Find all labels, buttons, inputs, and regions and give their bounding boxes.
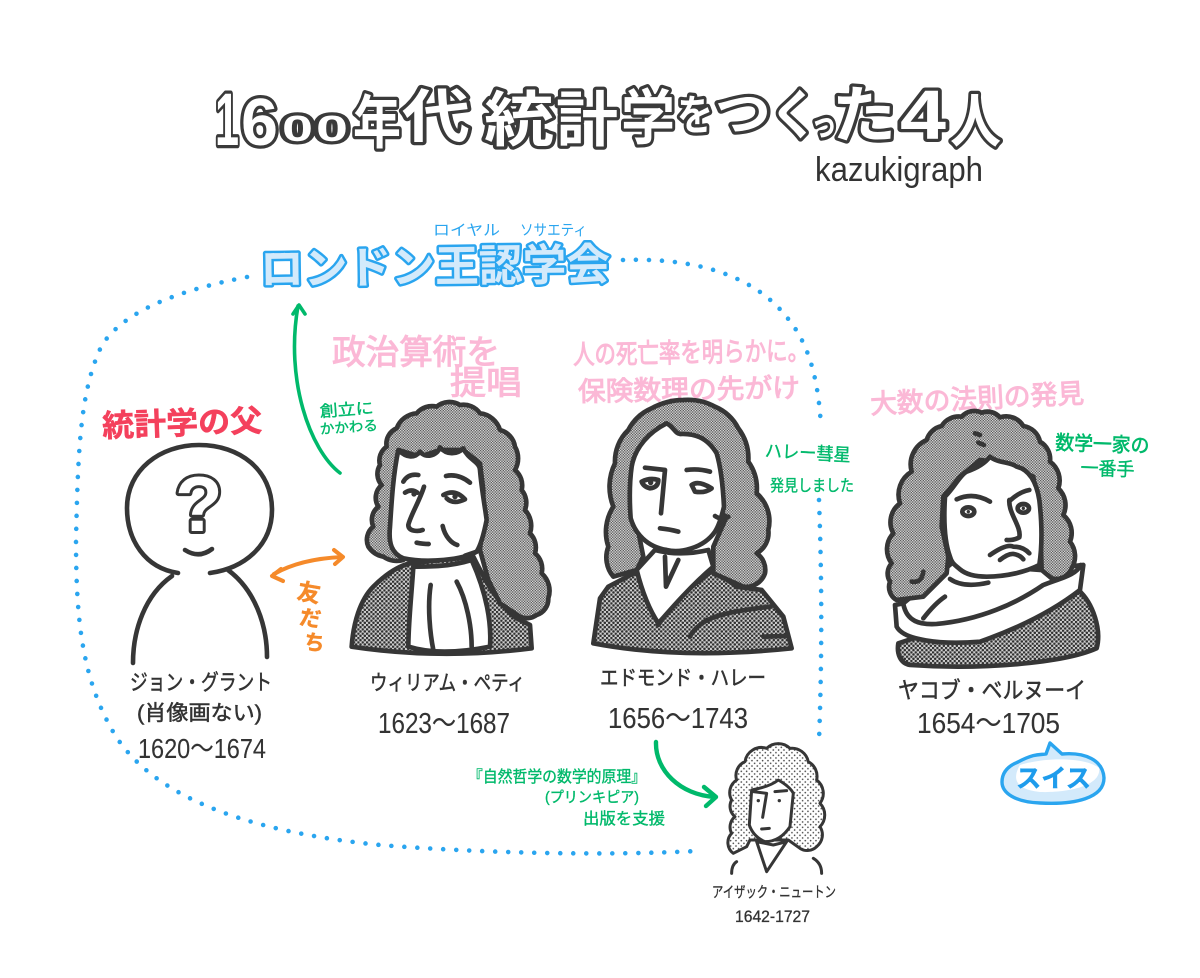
note: first of the math family xyxy=(1054,431,1150,482)
title: 代 xyxy=(402,85,470,150)
face xyxy=(749,780,793,842)
heading: law of large numbers: 大数の法則の発見 xyxy=(869,378,1085,420)
label: friends: ち xyxy=(302,630,327,657)
portrait: Isaac Newton xyxy=(728,744,825,873)
caption: William Petty: 1623〜1687 xyxy=(378,708,510,740)
arrow: friends xyxy=(272,550,343,581)
title: 4 xyxy=(900,76,946,154)
author credit: kazukigraph xyxy=(815,151,983,189)
caption: Isaac Newton: 1642-1727 xyxy=(735,907,810,926)
heading: mortality & actuarial pioneer: 人の死亡率を明らかに。 xyxy=(573,336,809,370)
scarf xyxy=(408,560,490,652)
note: Halley's comet xyxy=(764,441,854,495)
heading: mortality & actuarial pioneer: 保険数理の先がけ xyxy=(578,373,800,407)
note: Principia publication support: 『自然哲学の数学的原理』 xyxy=(468,768,646,786)
features xyxy=(403,475,418,482)
speech bubble: Switzerland: スイス xyxy=(1016,765,1091,793)
caption: William Petty xyxy=(370,672,525,740)
portrait: John Graunt silhouette xyxy=(127,445,272,663)
note: founding involvement: かかわる xyxy=(319,417,378,437)
heading: political arithmetic: 政治算術を xyxy=(332,334,500,372)
caption: John Graunt: ジョン・グラント xyxy=(130,670,272,695)
coat xyxy=(352,557,532,654)
dotted boundary: Royal Society xyxy=(76,277,697,853)
title: 学 xyxy=(621,85,675,152)
features xyxy=(753,792,767,817)
title: 0 xyxy=(282,108,313,149)
coat xyxy=(593,570,792,653)
caption: William Petty: ウィリアム・ペティ xyxy=(370,672,525,695)
coat folds xyxy=(690,607,770,637)
wig xyxy=(887,411,1075,600)
face xyxy=(944,457,1041,577)
note: founding involvement: 創立に xyxy=(319,399,374,421)
title: 1 xyxy=(215,78,239,161)
label: father of statistics: 統計学の父 xyxy=(102,403,263,444)
wig xyxy=(606,400,769,587)
title: 年 xyxy=(353,91,401,156)
coat xyxy=(898,590,1098,667)
portrait: Edmond Halley xyxy=(593,400,792,653)
caption: Edmond Halley: 1656〜1743 xyxy=(608,703,748,735)
note: first of the math family: 数学一家の xyxy=(1055,431,1150,458)
features xyxy=(957,496,990,502)
collar xyxy=(637,550,713,623)
features xyxy=(645,468,665,513)
title: 0 xyxy=(316,108,348,149)
caption: Isaac Newton: アイザック・ニュートン xyxy=(712,884,836,901)
face xyxy=(390,447,487,561)
furigana: Royal Society: ロイヤル xyxy=(433,222,500,239)
arrow: Petty to Royal Society xyxy=(293,305,340,473)
caption: Isaac Newton xyxy=(712,884,836,926)
caption: Jacob Bernoulli xyxy=(898,677,1086,740)
title xyxy=(215,76,1001,161)
note: Principia publication support: (プリンキピア) xyxy=(545,789,639,806)
furigana: Royal Society xyxy=(433,222,587,239)
collar xyxy=(757,842,787,872)
caption: Jacob Bernoulli: ヤコブ・ベルヌーイ xyxy=(898,677,1086,703)
caption: John Graunt xyxy=(130,670,272,764)
title: つ xyxy=(715,86,771,142)
dotted boundary: upper right xyxy=(623,260,821,427)
note: Principia publication support: 出版を支援 xyxy=(583,810,665,828)
note: Principia publication support xyxy=(468,768,665,828)
furigana: Royal Society: ソサエティ xyxy=(520,222,587,239)
scarf xyxy=(895,563,1083,643)
title: っ xyxy=(811,106,837,144)
heading: London Royal Society: ロンドン王認学会 xyxy=(260,241,610,294)
wig xyxy=(367,402,550,618)
speech bubble: Switzerland xyxy=(1002,743,1104,803)
label: friends: 友 xyxy=(295,578,323,608)
portrait: Jacob Bernoulli xyxy=(887,411,1098,667)
title: 統 xyxy=(484,87,554,154)
title: た xyxy=(832,82,896,151)
hair curl marks xyxy=(975,433,980,435)
face xyxy=(630,423,724,551)
caption: John Graunt: (肖像画ない) xyxy=(137,702,262,725)
caption: Jacob Bernoulli: 1654〜1705 xyxy=(917,708,1060,740)
caption: Edmond Halley: エドモンド・ハレー xyxy=(600,667,766,690)
portrait: John Graunt silhouette: ? xyxy=(175,460,223,548)
title: 人 xyxy=(950,90,1001,155)
wig xyxy=(728,744,825,853)
heading: mortality & actuarial pioneer xyxy=(573,336,809,407)
title: を xyxy=(677,92,713,139)
title: 6 xyxy=(241,85,278,160)
caption: Edmond Halley xyxy=(600,667,766,735)
note: founding involvement xyxy=(318,399,378,437)
note: first of the math family: 一番手 xyxy=(1080,457,1135,481)
heading: political arithmetic xyxy=(332,334,522,401)
label: friends: だ xyxy=(298,606,322,632)
label: friends xyxy=(295,578,327,657)
heading: political arithmetic: 提唱 xyxy=(450,364,522,401)
caption: John Graunt: 1620〜1674 xyxy=(138,733,266,764)
arrow: Halley to Newton xyxy=(656,742,716,806)
title: く xyxy=(770,86,818,146)
note: Halley's comet: 発見しました xyxy=(770,477,854,495)
note: Halley's comet: ハレー彗星 xyxy=(764,441,851,465)
portrait: William Petty xyxy=(352,402,550,654)
body xyxy=(732,862,737,873)
title: 計 xyxy=(556,87,618,154)
dotted boundary: lower right xyxy=(819,500,821,741)
